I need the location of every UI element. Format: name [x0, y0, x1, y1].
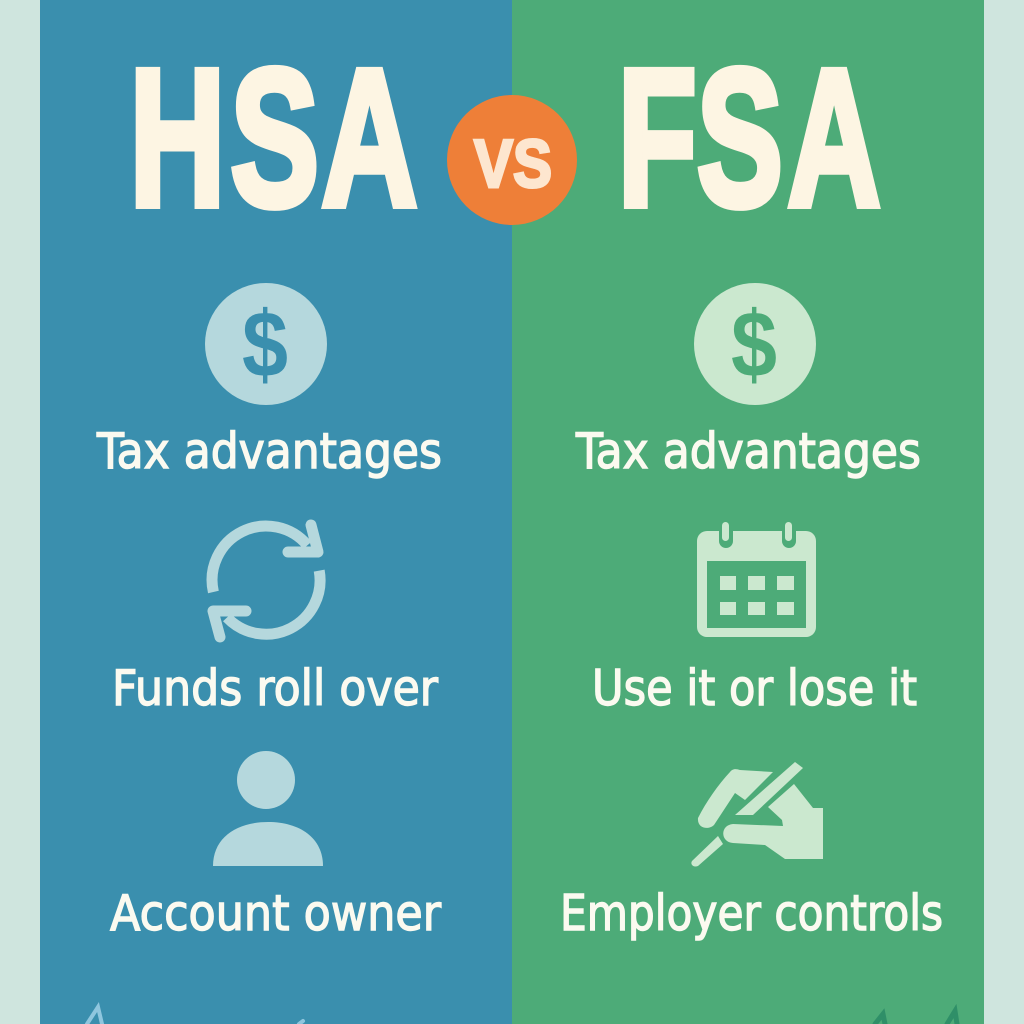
badge: VS: VS	[474, 126, 552, 202]
icon: account owner person	[213, 751, 323, 866]
badge: VS	[447, 95, 577, 225]
icon: dollar coin (FSA)	[694, 283, 816, 405]
label: FSA tax advantages: Tax advantages	[575, 423, 921, 480]
icon: dollar coin (FSA): $	[731, 292, 777, 396]
decorative marks at bottom edge	[87, 1007, 957, 1024]
label: employer controls: Employer controls	[560, 885, 943, 942]
panel: HSA	[40, 0, 512, 1024]
heading: HSA: HSA	[130, 30, 417, 247]
label: funds roll over: Funds roll over	[112, 660, 439, 717]
label: use it or lose it: Use it or lose it	[592, 660, 917, 717]
icon: dollar coin (HSA): $	[242, 292, 288, 396]
label: HSA tax advantages: Tax advantages	[96, 423, 442, 480]
icon: hand signing with pen	[691, 762, 823, 867]
icon: rollover arrows	[212, 525, 320, 637]
icon: dollar coin (HSA)	[205, 283, 327, 405]
heading: FSA: FSA	[618, 29, 881, 247]
panel: FSA	[512, 0, 984, 1024]
label: account owner: Account owner	[110, 885, 442, 942]
icon: calendar	[697, 522, 816, 637]
